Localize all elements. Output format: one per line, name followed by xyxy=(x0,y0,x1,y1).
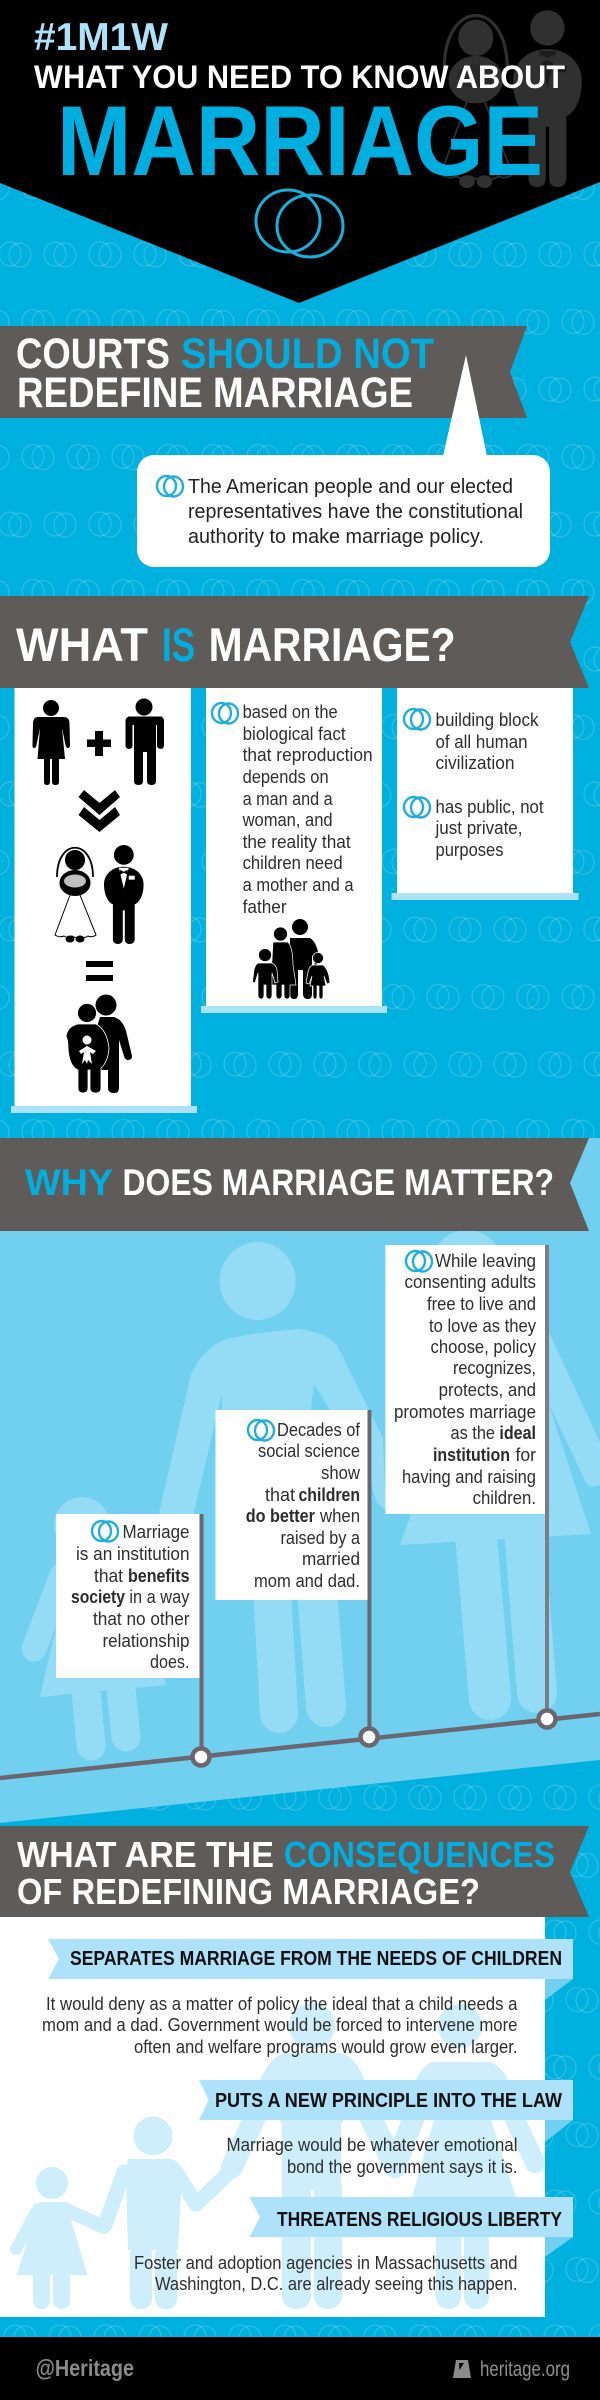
icon: woman xyxy=(32,700,70,785)
card: social science: that xyxy=(265,1485,295,1505)
text: public purposes: just private, xyxy=(435,818,522,838)
timeline xyxy=(0,1245,600,1778)
ribbon: new principle xyxy=(199,2080,573,2142)
text: deny ideal: mom and a dad. Government would be forced to intervene more xyxy=(42,2015,518,2035)
icon: family of four xyxy=(252,919,330,999)
card: social science: do better xyxy=(246,1506,315,1526)
banner: what is marriage: MARRIAGE? xyxy=(209,618,456,671)
text: foster agencies: Foster and adoption agencies in Massachusetts and xyxy=(134,2253,518,2273)
text: emotional bond: Marriage would be whatever emotional xyxy=(226,2135,518,2155)
icon: rings bullet one xyxy=(404,709,430,730)
column text: depends on xyxy=(243,767,329,787)
icon: baby xyxy=(79,1036,96,1064)
card: institution: that xyxy=(94,1566,123,1586)
column text: father xyxy=(243,897,287,917)
banner: what is marriage xyxy=(0,596,589,688)
banner: consequences xyxy=(0,1826,589,1917)
card: social science: social science xyxy=(258,1441,360,1461)
card: social science: mom and dad. xyxy=(254,1571,360,1591)
card: ideal institution: promotes marriage xyxy=(394,1402,536,1422)
text: deny ideal: It would deny as a matter of policy the ideal that a child needs a xyxy=(46,1994,518,2014)
banner: courts should not redefine marriage xyxy=(0,326,527,418)
banner: what is marriage: IS xyxy=(162,618,195,671)
card: ideal institution: free to live and xyxy=(427,1294,536,1314)
column text: biological fact xyxy=(243,724,346,744)
card: ideal institution: consenting adults xyxy=(404,1272,536,1292)
card: ideal institution: having and raising xyxy=(402,1467,536,1487)
ribbon: religious liberty: THREATENS RELIGIOUS LIBERTY xyxy=(277,2209,563,2231)
column text: woman, and xyxy=(242,810,333,830)
card: ideal institution: choose, policy xyxy=(430,1337,536,1357)
silhouette: woman at right xyxy=(400,1230,600,1699)
text: foster agencies xyxy=(134,2253,518,2294)
icon: wedding rings xyxy=(256,190,343,257)
card: ideal institution: recognizes, xyxy=(453,1358,536,1378)
icon: equals xyxy=(86,961,113,981)
footer site: heritage.org xyxy=(480,2358,570,2381)
ring pattern upper xyxy=(0,183,600,1138)
icon: plus xyxy=(87,731,111,756)
silhouette: woman xyxy=(395,2004,535,2309)
column text xyxy=(242,702,373,917)
banner: what is marriage: WHAT xyxy=(16,618,148,671)
card: institution: in a way xyxy=(129,1587,189,1607)
icon: rings bullet xyxy=(157,476,183,496)
card: ideal institution: institution xyxy=(433,1445,510,1465)
text: building block: of all human xyxy=(436,732,528,752)
banner: courts should not redefine marriage: SHOULD NOT xyxy=(181,330,434,378)
panel: consequences xyxy=(0,1917,573,2317)
icon: expecting couple xyxy=(66,994,132,1093)
title: marriage: MARRIAGE xyxy=(57,85,543,196)
panel: biological fact column xyxy=(201,680,387,1013)
banner: consequences: OF REDEFINING MARRIAGE? xyxy=(17,1871,480,1912)
hashtag: #1M1W xyxy=(34,16,168,59)
text: building block: building block xyxy=(436,710,539,730)
silhouette family xyxy=(16,2003,535,2309)
icon: rings bullet xyxy=(212,703,238,724)
column text: a mother and a xyxy=(243,875,355,895)
panel: man plus woman column xyxy=(11,680,197,1113)
banner: consequences: CONSEQUENCES xyxy=(284,1834,555,1875)
card: ideal institution: While leaving xyxy=(435,1251,536,1271)
ribbon: separates marriage xyxy=(48,1939,573,2000)
card: social science: Decades of xyxy=(277,1420,361,1440)
speech bubble callout xyxy=(137,355,550,567)
icon: liberty bell xyxy=(453,2360,471,2378)
icon: double chevron xyxy=(78,790,120,832)
card: social science: show xyxy=(321,1463,361,1483)
header: black chevron panel xyxy=(0,0,600,303)
ribbon: religious liberty xyxy=(250,2197,573,2257)
text: deny ideal xyxy=(42,1994,518,2057)
card: ideal institution xyxy=(385,1245,545,1514)
silhouette: child xyxy=(16,2167,104,2309)
card: social science: married xyxy=(302,1549,360,1569)
card: ideal institution: to love as they xyxy=(429,1316,536,1336)
card: social science: children xyxy=(298,1485,360,1505)
silhouette: mother xyxy=(159,1242,386,1714)
footer handle: @Heritage xyxy=(36,2355,134,2381)
card: institution: that no other xyxy=(93,1609,190,1629)
card: ideal institution: protects, and xyxy=(439,1380,536,1400)
banner: why does marriage matter: WHY xyxy=(25,1162,113,1203)
card: ideal institution: as the xyxy=(450,1423,495,1443)
callout text xyxy=(188,475,523,548)
panel: why marriage matters xyxy=(0,1138,600,1823)
card: ideal institution: for xyxy=(516,1445,536,1465)
icon: man xyxy=(126,698,164,785)
card: institution: relationship xyxy=(102,1631,190,1651)
title line: WHAT YOU NEED TO KNOW ABOUT xyxy=(34,59,565,95)
text: foster agencies: Washington, D.C. are already seeing this happen. xyxy=(155,2274,518,2294)
card: institution: benefits xyxy=(128,1566,190,1586)
banner: courts should not redefine marriage: REDEFINE MARRIAGE xyxy=(17,369,413,417)
card: social science xyxy=(216,1410,368,1600)
icon: groom xyxy=(104,845,144,944)
panel: building block column xyxy=(392,680,578,900)
card: ideal institution: children. xyxy=(473,1488,536,1508)
text: deny ideal: often and welfare programs would grow even larger. xyxy=(134,2037,518,2057)
text: building block: civilization xyxy=(436,753,514,773)
callout text: representatives have the constitutional xyxy=(188,500,523,523)
icon: bride silhouette xyxy=(441,16,512,187)
card: institution: is an institution xyxy=(76,1544,190,1564)
column text: based on the xyxy=(243,702,338,722)
banner: consequences: WHAT ARE THE xyxy=(17,1834,274,1875)
ribbon: new principle: PUTS A NEW PRINCIPLE INTO THE LAW xyxy=(215,2090,562,2112)
card: institution: society xyxy=(71,1587,125,1607)
ring pattern lower xyxy=(0,1750,600,2337)
column text: children need xyxy=(243,853,343,873)
icon: groom silhouette xyxy=(513,10,582,187)
card: ideal institution: ideal xyxy=(499,1423,536,1443)
card: institution: Marriage xyxy=(122,1522,190,1542)
icon: bride xyxy=(55,848,96,942)
text: emotional bond: bond the government says it is. xyxy=(287,2157,518,2177)
column text: that reproduction xyxy=(243,745,373,765)
column text: a man and a xyxy=(243,789,333,809)
banner: courts should not redefine marriage: COURTS xyxy=(16,330,170,378)
text: building block xyxy=(436,710,539,773)
icon: rings bullet two xyxy=(404,797,430,818)
text: emotional bond xyxy=(226,2135,518,2177)
card: institution xyxy=(56,1514,200,1678)
card: social science: raised by a xyxy=(280,1528,361,1548)
callout text: The American people and our elected xyxy=(188,475,513,498)
column text: the reality that xyxy=(243,832,351,852)
text: public purposes: purposes xyxy=(436,840,504,860)
text: public purposes: has public, not xyxy=(436,797,544,817)
footer xyxy=(0,2337,600,2400)
silhouette: father xyxy=(105,2116,234,2309)
banner: why does marriage matter xyxy=(0,1138,589,1231)
card: social science: when xyxy=(319,1506,360,1526)
silhouette: child xyxy=(34,1497,166,1746)
card: institution: does. xyxy=(150,1652,190,1672)
silhouette: second father xyxy=(232,2003,395,2309)
callout text: authority to make marriage policy. xyxy=(188,525,484,548)
text: public purposes xyxy=(435,797,544,860)
